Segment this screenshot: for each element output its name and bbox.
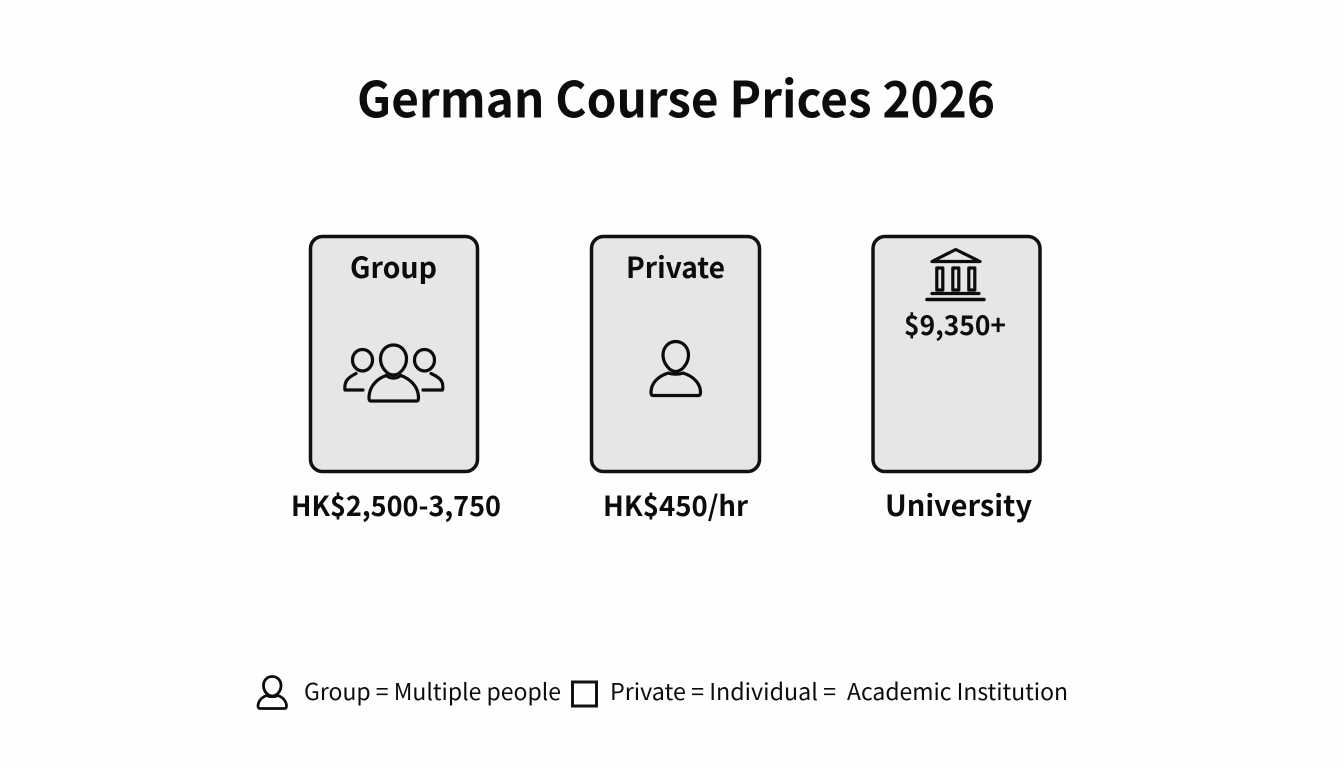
icon: person: [651, 342, 700, 396]
price: group: HK$2,500-3,750: [291, 485, 501, 525]
icon: institution building: [927, 250, 984, 300]
legend text: group: Group = Multiple people: [304, 673, 561, 707]
price: university: $9,350+: [904, 304, 1006, 343]
icon: legend person: [258, 676, 286, 708]
panel: university: [873, 236, 1040, 472]
icon: three people: [345, 345, 443, 401]
panel: group: [310, 236, 478, 472]
title: German Course Prices 2026: [357, 60, 995, 132]
panel: private: [592, 236, 760, 472]
heading: group: Group: [350, 245, 437, 287]
heading: private: Private: [626, 245, 725, 287]
legend: [258, 673, 1068, 708]
legend text: private: Private = Individual =: [610, 673, 836, 707]
icon: legend square: [572, 682, 596, 706]
legend text: university: Academic Institution: [847, 673, 1068, 707]
label: university: University: [885, 483, 1032, 525]
price: private: HK$450/hr: [603, 485, 749, 525]
